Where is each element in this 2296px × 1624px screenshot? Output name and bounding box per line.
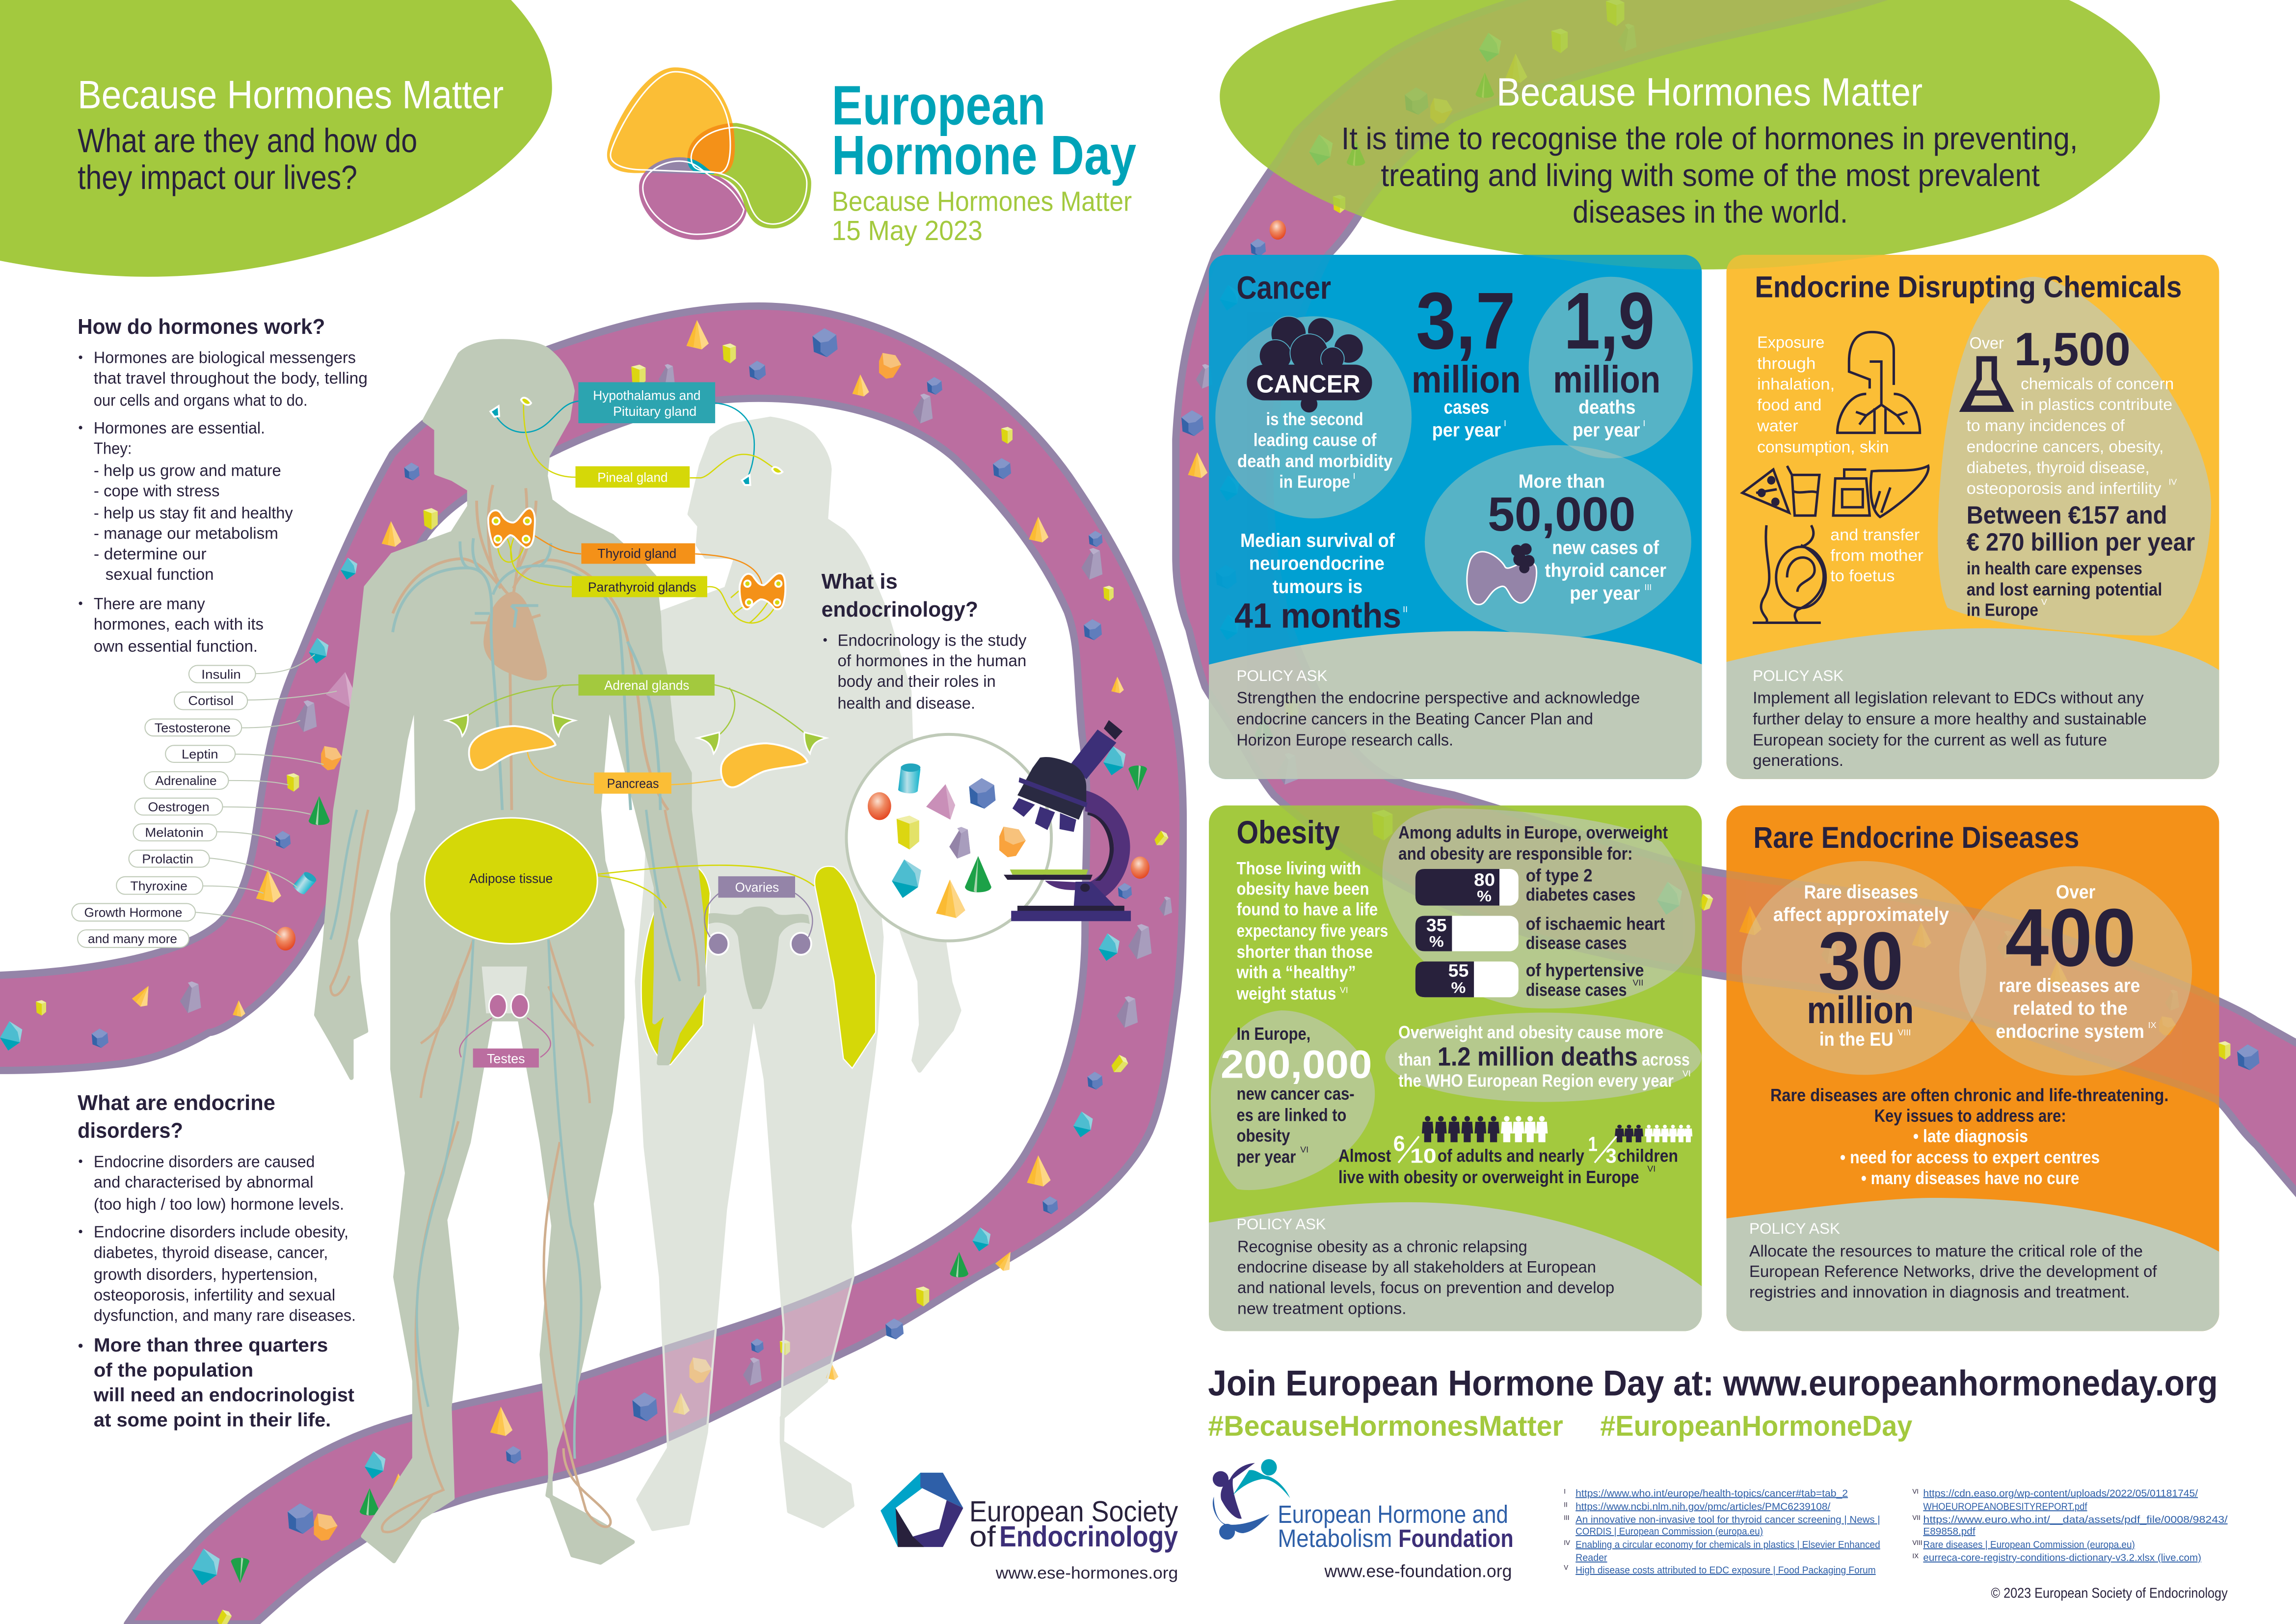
- text block: what is endocrinology: of hormones in the human: [838, 652, 1026, 670]
- text block: what is endocrinology: [822, 570, 1027, 713]
- stat bar: 55 percent hypertensive disease: [1415, 960, 1644, 1000]
- text block: what are endocrine disorders: and characterised by abnormal: [94, 1173, 313, 1191]
- gland label: parathyroid: Parathyroid glands: [588, 580, 696, 595]
- references: II: [1564, 1501, 1568, 1508]
- references: High disease costs attributed to EDC exposure | Food Packaging Forum: [1575, 1565, 1876, 1576]
- top-left heading blob: What are they and how do: [78, 122, 417, 160]
- panel: cancer: I: [1504, 418, 1506, 428]
- microscope inset circle with crystals: [846, 734, 1051, 941]
- panel: cancer: leading cause of: [1254, 431, 1376, 450]
- panel: obesity: Those living with: [1236, 859, 1361, 878]
- panel: cancer: endocrine cancers in the Beating Cancer Plan and: [1236, 710, 1593, 728]
- panel: obesity: across: [1642, 1050, 1690, 1069]
- stat bar: 80 percent type 2 diabetes: %: [1477, 888, 1492, 905]
- panel: obesity: and national levels, focus on prevention and develop: [1237, 1279, 1614, 1297]
- stat bar: 35 percent ischaemic heart disease: 35: [1426, 916, 1447, 935]
- panel: obesity: POLICY ASK: [1236, 1216, 1326, 1233]
- panel: cancer: new cases of: [1552, 538, 1659, 559]
- gland connectors and organ icons: [446, 398, 827, 787]
- icon: cancer cell with label: [1247, 316, 1372, 413]
- gland label: thyroid: [581, 543, 695, 564]
- text block: how do hormones work: - help us grow and mature: [94, 461, 281, 480]
- icon: laboratory flask: [1959, 356, 2014, 412]
- panel: rare endocrine diseases: VIII: [1898, 1028, 1911, 1037]
- adipose tissue patches on female body: [641, 863, 876, 1068]
- panel: obesity: children: [1617, 1146, 1678, 1166]
- logo: European Hormone and Metabolism Foundation: Metabolism: [1278, 1524, 1392, 1552]
- gland label: pineal: Pineal gland: [597, 470, 667, 485]
- panel: obesity: es are linked to: [1236, 1105, 1346, 1125]
- icon: thyroid with tumour: [1467, 543, 1537, 604]
- references: Reader: [1575, 1553, 1607, 1564]
- panel: obesity: Among adults in Europe, overweight: [1398, 823, 1668, 842]
- panel: obesity: 6: [1393, 1132, 1405, 1156]
- adipose tissue label bubble: Adipose tissue: [469, 871, 553, 886]
- text block: how do hormones work: [78, 315, 368, 655]
- panel: endocrine disrupting chemicals: further delay to ensure a more healthy and sustainable: [1753, 710, 2147, 728]
- panel: obesity: weight status: [1236, 984, 1336, 1003]
- gland label: hypothalamus and pituitary: Pituitary gland: [613, 404, 696, 419]
- panel: cancer: More than: [1519, 471, 1605, 492]
- uterus and ovaries: [705, 893, 812, 1009]
- panel: cancer: death and morbidity: [1237, 452, 1392, 471]
- panel: endocrine disrupting chemicals: 1,500: [2014, 324, 2131, 376]
- logo: European Society of Endocrinology: Endocrinology: [999, 1520, 1178, 1553]
- hashtags: #EuropeanHormoneDay: [1600, 1410, 1913, 1442]
- stat bar: 80 percent type 2 diabetes: 80: [1474, 870, 1495, 890]
- testes glands: [459, 967, 551, 1057]
- logo: European Hormone and Metabolism Foundation: www.ese-foundation.org: [1324, 1562, 1512, 1581]
- panel: rare endocrine diseases: Rare diseases are often chronic and life-threatening.: [1770, 1085, 2168, 1105]
- female body silhouette: [635, 416, 961, 1531]
- text block: how do hormones work: own essential function.: [94, 637, 258, 655]
- panel: rare endocrine diseases: related to the: [2013, 998, 2128, 1019]
- stat bar: 35 percent ischaemic heart disease: %: [1429, 933, 1444, 950]
- references: An innovative non-invasive tool for thyroid cancer screening | News |: [1575, 1515, 1880, 1525]
- panel: endocrine disrupting chemicals: European society for the current as well as future: [1753, 731, 2107, 749]
- text block: what are endocrine disorders: (too high / too low) hormone levels.: [94, 1195, 344, 1214]
- panel: endocrine disrupting chemicals: € 270 billion per year: [1967, 528, 2195, 556]
- top-left heading blob: Because Hormones Matter: [78, 73, 504, 117]
- panel: obesity: 200,000: [1221, 1042, 1372, 1086]
- text block: what is endocrinology: What is: [822, 570, 898, 594]
- hormone name pills: and many more: [88, 932, 177, 946]
- panel: cancer: II: [1403, 604, 1408, 614]
- panel: rare endocrine diseases: registries and innovation in diagnosis and treatment.: [1749, 1283, 2130, 1301]
- panel: cancer: per year: [1570, 583, 1640, 604]
- text block: what are endocrine disorders: osteoporosis, infertility and sexual: [94, 1286, 335, 1304]
- text block: what are endocrine disorders: at some point in their life.: [94, 1409, 331, 1431]
- text block: how do hormones work: our cells and organs what to do.: [94, 391, 308, 409]
- panel: cancer: is the second: [1266, 409, 1363, 429]
- panel: endocrine disrupting chemicals: [1727, 255, 2219, 779]
- panel: rare endocrine diseases: rare diseases are: [1999, 975, 2140, 997]
- panel: obesity: found to have a life: [1236, 899, 1378, 919]
- panel: rare endocrine diseases: endocrine system: [1996, 1021, 2144, 1042]
- panel: obesity: expectancy five years: [1236, 921, 1388, 941]
- adipose tissue label bubble: [425, 818, 814, 944]
- panel: endocrine disrupting chemicals: and lost earning potential: [1967, 580, 2162, 599]
- panel: cancer: million: [1553, 358, 1660, 401]
- hormone name pills: Prolactin: [142, 852, 193, 866]
- panel: cancer: I: [1353, 471, 1356, 481]
- text block: what is endocrinology: body and their roles in: [838, 673, 996, 691]
- male body silhouette: [316, 341, 704, 1563]
- gland label: pancreas: Pancreas: [607, 776, 659, 791]
- panel: obesity: and obesity are responsible for:: [1398, 844, 1633, 864]
- text block: how do hormones work: There are many: [94, 595, 205, 613]
- references: IX: [1912, 1552, 1919, 1560]
- logo: European Society of Endocrinology: European Society: [969, 1495, 1178, 1528]
- stat bar: 80 percent type 2 diabetes: of type 2: [1526, 866, 1592, 886]
- references: I: [1564, 1488, 1566, 1495]
- panel: obesity: the WHO European Region every year: [1398, 1071, 1674, 1090]
- panel: cancer: POLICY ASK: [1236, 667, 1328, 684]
- references: Enabling a circular economy for chemicals in plastics | Elsevier Enhanced: [1575, 1540, 1880, 1550]
- panel: obesity: than: [1398, 1050, 1431, 1069]
- logo: European Society of Endocrinology: [881, 1473, 1178, 1583]
- panel: endocrine disrupting chemicals: to many incidences of: [1967, 417, 2125, 435]
- references: E89858.pdf: [1923, 1526, 1976, 1537]
- top-right heading oval: [1209, 0, 2219, 1533]
- logo: European Hormone and Metabolism Foundation: European Hormone and: [1278, 1500, 1508, 1528]
- panel: obesity: new cancer cas-: [1236, 1084, 1355, 1104]
- panel: endocrine disrupting chemicals: Endocrine Disrupting Chemicals: [1755, 271, 2182, 304]
- panel: endocrine disrupting chemicals: consumption, skin: [1757, 438, 1889, 457]
- gland label: thyroid: Thyroid gland: [597, 546, 676, 561]
- panel: endocrine disrupting chemicals: IV: [2168, 477, 2177, 487]
- hormone name pills: Growth Hormone: [84, 906, 182, 920]
- references: https://cdn.easo.org/wp-content/uploads/2022/05/01181745/: [1923, 1488, 2198, 1499]
- hormone name pills: Melatonin: [145, 826, 204, 840]
- gland label: adrenal: Adrenal glands: [604, 678, 689, 693]
- icons: lungs, food, cosmetics, hand, pregnancy: [1742, 332, 1928, 623]
- text block: what are endocrine disorders: [78, 1091, 356, 1431]
- panel: endocrine disrupting chemicals: generations.: [1753, 752, 1843, 770]
- text block: how do hormones work: They:: [94, 440, 132, 458]
- panel: endocrine disrupting chemicals: V: [2041, 597, 2047, 607]
- references: Rare diseases | European Commission (europa.eu): [1923, 1540, 2135, 1550]
- panel: obesity: obesity: [1236, 1126, 1290, 1146]
- hormone name pills: Leptin: [182, 748, 218, 761]
- text block: what are endocrine disorders: growth disorders, hypertension,: [94, 1266, 318, 1284]
- panel: endocrine disrupting chemicals: and transfer: [1830, 526, 1920, 544]
- panel: rare endocrine diseases: • late diagnosis: [1913, 1127, 2028, 1146]
- panel: obesity: Almost: [1338, 1146, 1391, 1166]
- European Hormone Day logo: [607, 67, 811, 240]
- panel: endocrine disrupting chemicals: Between €157 and: [1967, 501, 2167, 529]
- panel: cancer: 1,9: [1564, 275, 1655, 366]
- panel: rare endocrine diseases: Rare diseases: [1804, 882, 1918, 903]
- text block: how do hormones work: - manage our metabolism: [94, 525, 278, 543]
- text block: how do hormones work: - determine our: [94, 545, 207, 563]
- text block: what is endocrinology: Endocrinology is the study: [838, 631, 1027, 650]
- text block: what are endocrine disorders: disorders?: [78, 1119, 183, 1143]
- gland label: hypothalamus and pituitary: [578, 382, 715, 423]
- top-left heading blob: [0, 0, 552, 277]
- panel: endocrine disrupting chemicals: in plastics contribute: [2021, 396, 2172, 414]
- hashtags: [1208, 1410, 1913, 1442]
- top-right heading oval: treating and living with some of the most prevalent: [1381, 158, 2040, 193]
- logo wordmark: 15 May 2023: [832, 216, 983, 246]
- gland label: parathyroid: [572, 576, 707, 597]
- panel: cancer: Strengthen the endocrine perspective and acknowledge: [1236, 689, 1640, 707]
- panel: obesity: VI: [1647, 1164, 1655, 1173]
- text block: how do hormones work: hormones, each with its: [94, 616, 264, 634]
- panel: rare endocrine diseases: • many diseases have no cure: [1861, 1168, 2079, 1188]
- stat bar: 55 percent hypertensive disease: disease cases: [1526, 980, 1627, 1000]
- panel: rare endocrine diseases: POLICY ASK: [1749, 1220, 1840, 1237]
- logo wordmark: [832, 75, 1136, 246]
- microscope: [1004, 720, 1131, 921]
- top-left heading blob: they impact our lives?: [78, 159, 357, 196]
- logo: European Society of Endocrinology: www.ese-hormones.org: [995, 1564, 1178, 1583]
- copyright: © 2023 European Society of Endocrinology: [1991, 1585, 2228, 1601]
- text block: how do hormones work: - cope with stress: [94, 482, 220, 500]
- panel: obesity: Overweight and obesity cause more: [1398, 1023, 1663, 1042]
- panel: endocrine disrupting chemicals: chemicals of concern: [2021, 375, 2174, 393]
- panel: rare endocrine diseases: European Reference Networks, drive the development of: [1749, 1263, 2157, 1281]
- pictogram: adults 6 of 10: [1422, 1116, 1548, 1142]
- logo: European Hormone and Metabolism Foundation: Foundation: [1398, 1524, 1514, 1552]
- panel: endocrine disrupting chemicals: Over: [1970, 334, 2004, 352]
- text block: what are endocrine disorders: dysfunction, and many rare diseases.: [94, 1307, 356, 1325]
- text block: how do hormones work: that travel throughout the body, telling: [94, 370, 368, 388]
- panel: endocrine disrupting chemicals: endocrine cancers, obesity,: [1967, 438, 2163, 456]
- panel: cancer: neuroendocrine: [1249, 553, 1385, 574]
- references: WHOEUROPEANOBESITYREPORT.pdf: [1923, 1501, 2087, 1512]
- text block: what are endocrine disorders: What are endocrine: [78, 1091, 275, 1115]
- gland label: testes: [473, 1049, 539, 1068]
- references: CORDIS | European Commission (europa.eu): [1575, 1526, 1763, 1537]
- panel: obesity: new treatment options.: [1237, 1300, 1407, 1318]
- panel: rare endocrine diseases: Rare Endocrine Diseases: [1753, 821, 2079, 854]
- text block: what is endocrinology: endocrinology?: [822, 598, 978, 622]
- panel: endocrine disrupting chemicals: diabetes, thyroid disease,: [1967, 459, 2150, 477]
- hashtags: #BecauseHormonesMatter: [1208, 1410, 1563, 1442]
- panel: rare endocrine diseases: affect approximately: [1773, 904, 1949, 925]
- hormone name pills: Insulin: [201, 668, 241, 682]
- panel: endocrine disrupting chemicals: POLICY ASK: [1753, 667, 1843, 684]
- hormone name pills: Cortisol: [188, 694, 234, 708]
- top-right heading oval: It is time to recognise the role of hormones in preventing,: [1341, 121, 2078, 156]
- panel: cancer: [1209, 255, 1702, 779]
- gland label: adrenal: [578, 675, 715, 696]
- text block: what are endocrine disorders: diabetes, thyroid disease, cancer,: [94, 1244, 328, 1262]
- panel: endocrine disrupting chemicals: through: [1757, 355, 1815, 373]
- panel: endocrine disrupting chemicals: osteoporosis and infertility: [1967, 480, 2162, 498]
- panel: obesity: 3: [1605, 1144, 1617, 1167]
- hormone name pills: Testosterone: [155, 721, 231, 735]
- panel: endocrine disrupting chemicals: Implement all legislation relevant to EDCs without any: [1753, 689, 2144, 707]
- logo wordmark: Hormone Day: [832, 124, 1136, 187]
- text block: how do hormones work: Hormones are essential.: [94, 419, 265, 437]
- panel: rare endocrine diseases: Allocate the resources to mature the critical role of the: [1749, 1242, 2143, 1260]
- references: https://www.ncbi.nlm.nih.gov/pmc/articles/PMC6239108/: [1575, 1501, 1831, 1512]
- stat bar: 55 percent hypertensive disease: 55: [1448, 961, 1468, 981]
- panel: obesity: Recognise obesity as a chronic relapsing: [1237, 1238, 1527, 1256]
- panel: obesity: VI: [1300, 1145, 1308, 1155]
- panel: rare endocrine diseases: 30: [1818, 916, 1903, 1007]
- logo: European Society of Endocrinology: of: [969, 1520, 996, 1553]
- panel: cancer: I: [1643, 418, 1645, 428]
- panel: cancer: million: [1412, 358, 1521, 401]
- panel: rare endocrine diseases: [1727, 805, 2219, 1331]
- panel: obesity: with a “healthy”: [1236, 963, 1356, 982]
- panel: cancer: 3,7: [1416, 275, 1516, 366]
- panel: endocrine disrupting chemicals: in Europe: [1967, 600, 2038, 620]
- panel: endocrine disrupting chemicals: inhalation,: [1757, 375, 1835, 393]
- panel: rare endocrine diseases: IX: [2148, 1020, 2157, 1030]
- panel: rare endocrine diseases: • need for access to expert centres: [1840, 1148, 2100, 1167]
- panel: obesity: VI: [1682, 1068, 1691, 1078]
- references: III: [1564, 1514, 1569, 1521]
- panel: cancer: tumours is: [1273, 576, 1362, 597]
- panel: rare endocrine diseases: Over: [2056, 882, 2095, 903]
- top-right heading oval: Because Hormones Matter: [1496, 70, 1922, 114]
- panel: obesity: Obesity: [1236, 814, 1340, 850]
- gland label: pancreas: [594, 772, 671, 794]
- stat bar: 35 percent ischaemic heart disease: [1415, 914, 1665, 953]
- text block: what are endocrine disorders: will need an endocrinologist: [93, 1385, 354, 1406]
- panel: obesity: per year: [1236, 1147, 1296, 1166]
- panel: obesity: [1209, 805, 1702, 1331]
- panel: cancer: deaths: [1578, 397, 1635, 418]
- panel: obesity: endocrine disease by all stakeholders at European: [1237, 1258, 1596, 1276]
- stat bar: 55 percent hypertensive disease: of hypertensive: [1526, 960, 1644, 980]
- panel: cancer: cases: [1444, 397, 1489, 418]
- stat bar: 80 percent type 2 diabetes: [1415, 866, 1635, 906]
- call to action: website: Join European Hormone Day at: www.europeanhormoneday.org: [1208, 1364, 2218, 1404]
- references: https://www.who.int/europe/health-topics/cancer#tab=tab_2: [1575, 1488, 1848, 1499]
- text block: what are endocrine disorders: Endocrine disorders are caused: [94, 1153, 315, 1171]
- hormone name pills: Thyroxine: [131, 880, 187, 893]
- panel: endocrine disrupting chemicals: water: [1757, 417, 1798, 435]
- stat bar: 35 percent ischaemic heart disease: of ischaemic heart: [1526, 914, 1665, 934]
- hormone name pills: Adrenaline: [155, 774, 217, 788]
- top-right heading oval: diseases in the world.: [1573, 194, 1848, 229]
- panel: obesity: obesity have been: [1236, 879, 1369, 899]
- stat bar: 55 percent hypertensive disease: %: [1451, 979, 1466, 996]
- stat bar: 80 percent type 2 diabetes: diabetes cases: [1526, 885, 1635, 904]
- gland label: ovaries: Ovaries: [735, 880, 779, 895]
- logo wordmark: Because Hormones Matter: [832, 187, 1132, 217]
- logo: European Hormone and Metabolism Foundation: [1213, 1459, 1514, 1581]
- text block: what are endocrine disorders: More than three quarters: [94, 1335, 328, 1356]
- icon: cancer cell with label: CANCER: [1256, 370, 1361, 398]
- references: eurreca-core-registry-conditions-dictionary-v3.2.xlsx (live.com): [1923, 1553, 2201, 1564]
- text block: what are endocrine disorders: Endocrine disorders include obesity,: [94, 1223, 348, 1242]
- panel: rare endocrine diseases: Key issues to address are:: [1874, 1106, 2066, 1126]
- gland label: pineal: [575, 466, 690, 487]
- panel: cancer: Horizon Europe research calls.: [1236, 731, 1453, 749]
- panel: cancer: thyroid cancer: [1545, 560, 1666, 581]
- panel: obesity: VI: [1340, 985, 1348, 995]
- panel: cancer: in Europe: [1279, 472, 1350, 491]
- panel: rare endocrine diseases: million: [1807, 989, 1914, 1031]
- panel: rare endocrine diseases: 400: [2005, 892, 2136, 983]
- panel: cancer: Cancer: [1236, 270, 1331, 306]
- hormone name pills: [72, 654, 337, 947]
- panel: obesity: shorter than those: [1236, 942, 1373, 962]
- references: [1564, 1488, 2228, 1576]
- circulatory system: arteries and veins: [331, 485, 699, 1532]
- panel: cancer: 50,000: [1488, 487, 1635, 541]
- panel: endocrine disrupting chemicals: to foetus: [1830, 567, 1895, 585]
- logo wordmark: European: [832, 75, 1045, 137]
- references: IV: [1564, 1539, 1570, 1546]
- hormone name pills: Oestrogen: [148, 801, 210, 814]
- panel: cancer: per year: [1432, 420, 1501, 441]
- pictogram: children 1 of 3: [1615, 1125, 1692, 1142]
- references: https://www.euro.who.int/__data/assets/pdf_file/0008/98243/: [1923, 1515, 2228, 1525]
- panel: obesity: live with obesity or overweight in Europe: [1338, 1167, 1639, 1187]
- gland label: testes: Testes: [487, 1052, 525, 1066]
- references: VII: [1912, 1514, 1921, 1521]
- panel: obesity: of adults and nearly: [1438, 1146, 1584, 1166]
- panel: endocrine disrupting chemicals: food and: [1757, 396, 1821, 414]
- text block: what are endocrine disorders: of the population: [94, 1360, 253, 1381]
- text block: what is endocrinology: health and disease.: [838, 695, 975, 713]
- panel: obesity: 1.2 million deaths: [1438, 1042, 1638, 1071]
- panel: cancer: 41 months: [1234, 596, 1401, 636]
- references: VIII: [1912, 1539, 1922, 1546]
- stat bar: 35 percent ischaemic heart disease: disease cases: [1526, 933, 1627, 953]
- panel: endocrine disrupting chemicals: in health care expenses: [1967, 559, 2142, 578]
- panel: endocrine disrupting chemicals: from mother: [1830, 546, 1923, 565]
- panel: rare endocrine diseases: in the EU: [1819, 1029, 1894, 1050]
- references: VI: [1912, 1488, 1919, 1495]
- panel: endocrine disrupting chemicals: Exposure: [1757, 334, 1824, 352]
- panel: cancer: per year: [1573, 420, 1640, 441]
- panel: obesity: 10: [1410, 1144, 1437, 1167]
- text block: how do hormones work: How do hormones work?: [78, 315, 325, 339]
- stat bar: 55 percent hypertensive disease: VII: [1633, 977, 1643, 987]
- panel: cancer: III: [1644, 582, 1652, 592]
- panel: obesity: 1: [1588, 1133, 1598, 1156]
- text block: how do hormones work: Hormones are biological messengers: [94, 349, 356, 367]
- text block: how do hormones work: - help us stay fit and healthy: [94, 504, 293, 522]
- panel: cancer: Median survival of: [1240, 530, 1395, 551]
- references: V: [1564, 1564, 1568, 1571]
- gland label: ovaries: [718, 876, 795, 897]
- panel: obesity: In Europe,: [1236, 1024, 1310, 1044]
- gland label: hypothalamus and pituitary: Hypothalamus and: [593, 388, 701, 403]
- text block: how do hormones work: sexual function: [106, 566, 214, 584]
